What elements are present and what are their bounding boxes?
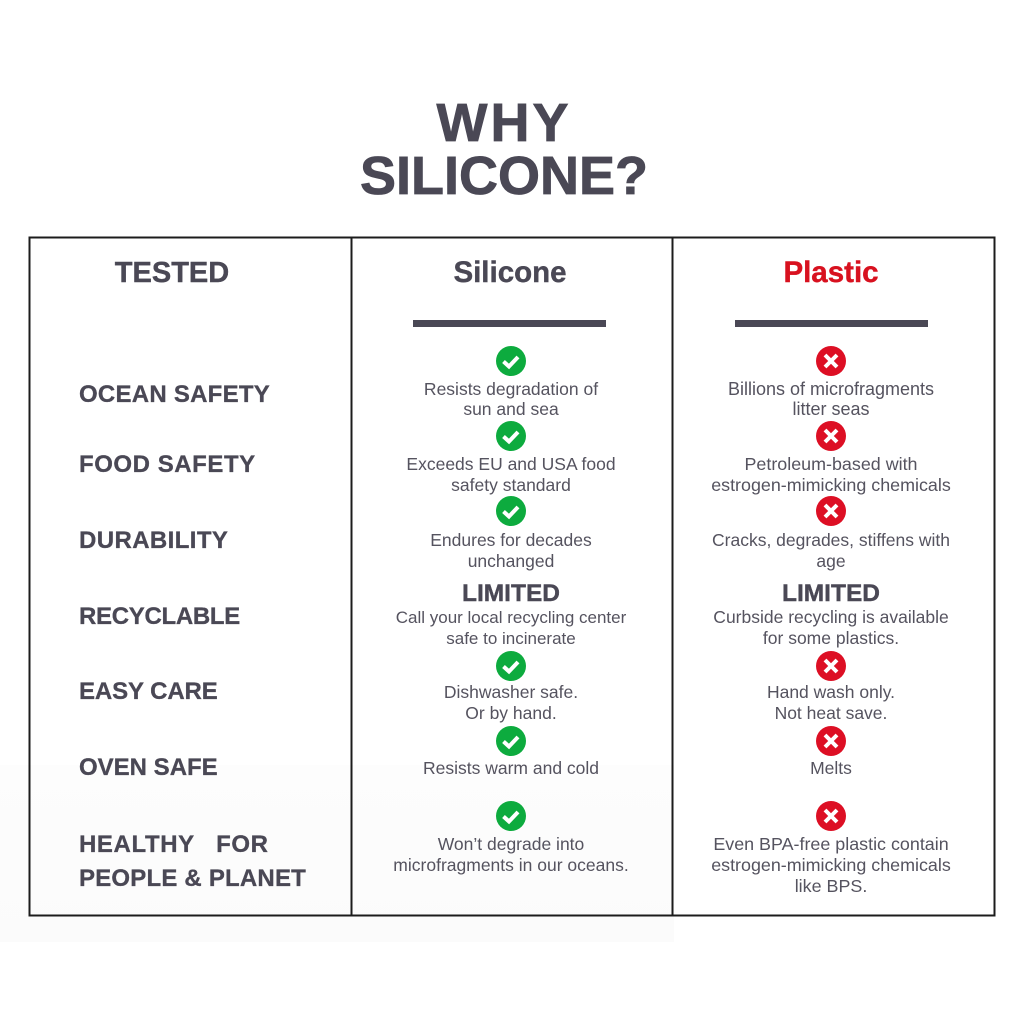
silicone: food [406,454,616,495]
plastic: limited heading: LIMITED [782,580,880,607]
plastic: healthy: Even BPA-free plastic contain [713,834,949,854]
plastic: recyclable: for some plastics. [763,628,899,648]
silicone: limited heading: LIMITED [462,580,560,607]
silicone: healthy: Won’t degrade into [438,834,584,854]
silicone: food: Exceeds EU and USA food [406,454,616,474]
plastic: healthy [711,834,951,896]
silicone: oven: Resists warm and cold [423,758,599,778]
column heading: silicone: Silicone [453,256,567,289]
plastic: ocean: litter seas [792,399,870,419]
row label: durability: DURABILITY [79,527,228,554]
silicone: recyclable [396,608,626,648]
plastic: care [767,682,895,723]
plastic: healthy: estrogen-mimicking chemicals [711,855,951,875]
row label: recyclable: RECYCLABLE [79,603,240,630]
plastic: care: Not heat save. [775,703,887,723]
plastic: care: Hand wash only. [767,682,895,702]
plastic: ocean [728,379,934,419]
plastic: food: Petroleum-based with [744,454,918,474]
silicone: healthy: microfragments in our oceans. [393,855,629,875]
silicone: recyclable: safe to incinerate [446,629,576,648]
silicone: durability: Endures for decades [430,530,592,550]
silicone: ocean: sun and sea [463,399,559,419]
silicone: food: safety standard [451,475,571,495]
plastic: oven: Melts [810,758,852,778]
silicone: ocean [424,379,598,419]
title [360,93,648,206]
silicone: durability [430,530,592,571]
silicone: healthy [393,834,629,875]
row label: food safety: FOOD SAFETY [79,451,256,478]
plastic: recyclable [713,607,949,648]
title: WHY [437,93,571,153]
plastic: healthy: like BPS. [795,876,867,896]
row label: ocean safety: OCEAN SAFETY [79,381,270,408]
column heading: plastic: Plastic [783,256,879,289]
row label: easy care: EASY CARE [79,678,218,705]
silicone: care [444,682,578,723]
plastic: recyclable: Curbside recycling is available [713,607,949,627]
plastic: durability: age [816,551,846,571]
row label: healthy: HEALTHY FOR PEOPLE & PLANET [79,831,306,892]
column heading: tested: TESTED [115,257,229,289]
plastic: food: estrogen-mimicking chemicals [711,475,951,495]
silicone: ocean: Resists degradation of [424,379,598,399]
silicone: recyclable: Call your local recycling center [396,608,626,627]
silicone: care: Or by hand. [465,703,557,723]
plastic: ocean: Billions of microfragments [728,379,934,399]
silicone: care: Dishwasher safe. [444,682,578,702]
plastic: durability: Cracks, degrades, stiffens with [712,530,950,550]
silicone: durability: unchanged [468,551,554,571]
title: SILICONE? [360,146,648,206]
plastic: food [711,454,951,495]
plastic: durability [712,530,950,571]
row label: oven safe: OVEN SAFE [79,754,218,781]
